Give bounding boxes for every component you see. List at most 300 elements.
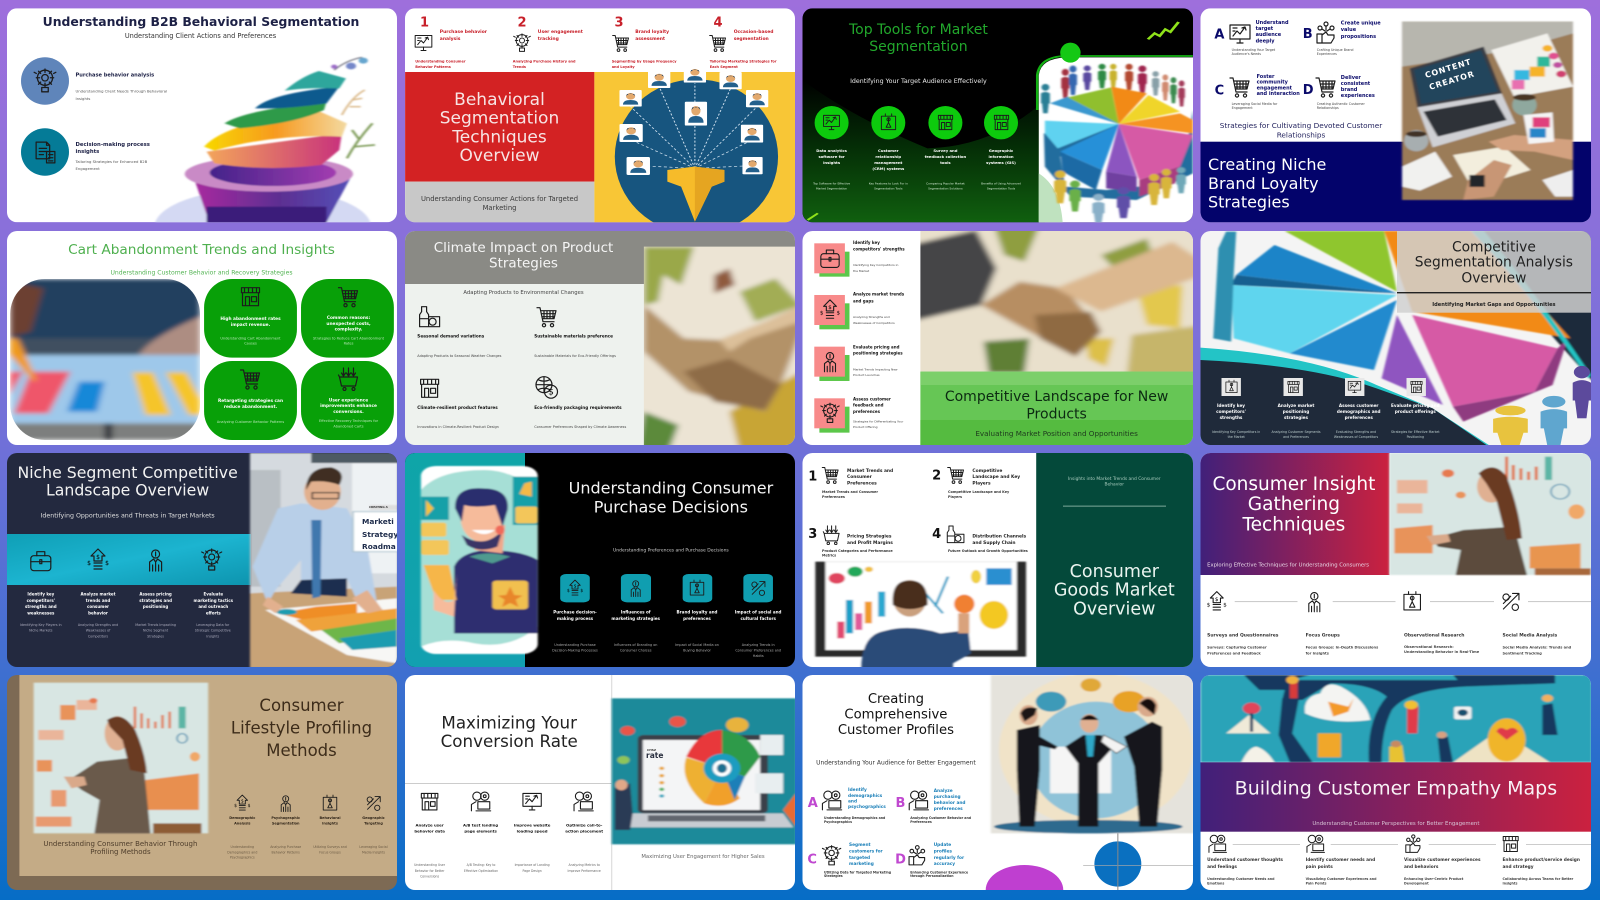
item 2: Competitive [972,468,1002,474]
item: GIS: Benefits of Using Advanced [981,181,1021,185]
item: behavioral insights: Utilizing Surveys and [313,845,347,849]
item: evaluate pricing: positioning strategies [853,351,903,356]
item: purchase behavior analysis: Insights [76,96,90,101]
item: demographic analysis: Psychographics [230,855,255,859]
item: identify competitors: competitors' [1216,409,1246,414]
item 2: 2 [517,15,527,30]
panel: Consumer Insight Gathering Techniques [1200,453,1592,667]
illustration: audience targeting funnel [405,66,796,234]
item: analyze market trends [814,292,905,329]
item B: B [1303,27,1313,42]
item: identify competitors: Identifying Key Players in [20,623,62,627]
card: high abandonment rates: High abandonment rates [220,316,281,322]
item: assess pricing: Assess pricing [139,592,172,597]
item D: Deliver [1341,75,1361,81]
panel: Building Customer Empathy Maps [1200,675,1592,890]
item: identify competitors [1212,378,1260,439]
subtitle [1063,476,1166,506]
item: thoughts and feelings [1207,835,1283,885]
item: analyze user behavior: Understanding User [414,863,446,867]
item: analyze market trends: consumer [87,604,109,609]
item: website speed: loading speed [517,828,548,833]
item: survey and feedback tools [925,106,966,190]
subtitle: Understanding Preferences and Purchase Decisions [613,547,729,553]
overlay box with title: Competitive [1452,240,1536,256]
title: Customer Profiles [838,723,954,738]
item: social media analysis: Social Media Analysis [1502,633,1558,639]
title: Gathering [1248,494,1340,515]
item: identify competitors [814,240,905,277]
item D: accuracy [934,861,955,867]
panel: Competitive Segmentation Analysis Overview [1200,231,1596,447]
item C: Strategies [824,874,843,878]
item 4: Future Outlook and Growth Opportunities [948,549,1028,553]
item: climate-resilient features: Innovations in Climate-Resilient Product Design [417,425,499,429]
item: evaluate marketing tactics: Insights [206,634,220,638]
overlay box with title: Segmentation Analysis [1415,255,1573,271]
item: thoughts and feelings: Emotions [1207,881,1224,885]
item: analyze positioning: and Preferences [1283,435,1309,439]
item: demographic analysis: Analysis [234,821,251,825]
item: purchase decision-making: making process [557,616,594,621]
item: assess demographics: demographics and [1337,409,1381,414]
item: CRM systems: Segmentation Tools [874,186,903,190]
item: assess feedback: feedback and [853,403,884,408]
title: Climate Impact on Product [434,240,613,256]
item: observational research: Understanding Behavior in Real-Time [1404,650,1480,654]
item: analyze market trends: Analyze market trends [853,292,905,297]
item: A/B test: page elements [464,828,497,833]
card: user experience improvements: conversions. [333,409,364,415]
item: assess pricing: Niche Segment [143,628,169,632]
photo: content creator desk [1402,22,1573,200]
card: retargeting strategies: Analyzing Customer Behavior Patterns [217,420,284,424]
item: GIS: systems (GIS) [986,160,1016,165]
item: surveys and questionnaires: Surveys: Capturing Customer [1207,646,1267,650]
item: evaluate pricing [1391,378,1440,439]
item: behavioral insights [313,795,347,854]
item 4: Distribution Channels [972,533,1027,539]
item: product/service design: Enhance product/service design [1502,857,1580,863]
illustration: customer journey map [1201,675,1592,762]
card: user experience improvements [301,361,394,440]
item 3 [612,15,677,69]
item: GIS: Segmentation Tools [987,186,1016,190]
item 4: 4 [713,15,723,30]
item B: behavior and [934,800,966,806]
item C: C [807,852,817,867]
item: assess feedback [814,396,904,433]
item D: experiences [1341,93,1375,99]
photo: content creator desk: CREATOR [1428,69,1476,92]
item: sustainable materials: Sustainable Materials for Eco-Friendly Offerings [534,354,616,358]
item B [1303,20,1381,56]
item A: Understanding Demographics and [824,816,886,820]
photo: man with marketing roadmap: Marketi [362,517,394,526]
item: observational research: Observational Research [1404,633,1464,639]
item 1 [415,15,488,69]
item: psychographic segmentation [270,796,301,854]
item A: demographics [848,793,883,799]
item: geographic targeting [359,797,388,854]
item: needs and pain points: Identify customer needs and [1306,857,1375,863]
card: user experience improvements: improvements enhance [320,403,377,409]
subtitle: Identifying Opportunities and Threats in Target Markets [40,513,215,520]
item: CRM systems [869,106,908,190]
item: assess demographics: Assess customer [1339,403,1379,408]
item: brand loyalty: Brand loyalty and [677,610,718,614]
item: website speed [514,793,551,873]
item: assess pricing: Market Trends Impacting [135,623,176,627]
item: climate-resilient features: Climate-resilient product features [417,405,498,410]
illustration: man at whiteboard [815,562,1026,670]
item: evaluate pricing: Product Launches [853,373,880,377]
item: identify competitors: the Market [1228,435,1246,439]
card: user experience improvements: Abandoned Carts [333,424,364,428]
item: website speed: Importance of Landing [515,863,550,867]
overlay box with title: Overview [1461,271,1526,287]
item: assess feedback: Product Offering [853,425,878,429]
item: decision-making process insights: Engagement [76,166,100,171]
item 3: Pricing Strategies [847,533,892,539]
item: decision-making process insights: insights [76,149,99,155]
card: user experience improvements: Effective Recovery Techniques for [319,419,379,423]
item A: Understand [1256,20,1289,26]
item C: customers for [849,848,884,854]
item 4: Each Segment [710,65,738,69]
item D: Relationships [1317,106,1339,110]
item: CRM systems: (CRM) systems [872,166,905,171]
item A: and [848,798,857,804]
item: A/B test [463,792,498,873]
item: needs and pain points: Pain Points [1306,881,1327,885]
item D: D [1303,83,1314,98]
subtitle: Understanding Customer Behavior and Recovery Strategies [110,270,293,276]
item 1: Preferences [822,495,845,499]
item: social media analysis: Social Media Analysis: Trends and [1502,646,1572,650]
item: CRM systems: Customer [878,148,899,153]
item: product/service design [1502,836,1580,885]
item: assess demographics [1334,378,1381,439]
title: Creating [868,692,924,707]
title: Segmentation [440,109,559,129]
item: analyze market trends: Competitors [88,634,108,638]
item: data analytics software [812,106,850,190]
photo: handshake over world map [644,246,795,445]
item 1: analysis [440,36,461,42]
title: Top Tools for Market [848,22,988,38]
item C: targeted [849,855,870,861]
item: thoughts and feelings: Understand customer thoughts [1207,857,1283,863]
item: seasonal demand [417,307,502,358]
photo: man with marketing roadmap: CREATING A [369,505,389,509]
photo: three business people with globe [991,673,1194,833]
item: focus groups [1306,593,1378,656]
item: surveys and questionnaires [1207,592,1279,656]
card: retargeting strategies: reduce abandonment. [224,404,278,410]
item: assess pricing [135,550,176,638]
photo: man with marketing roadmap: Roadma [362,542,396,551]
item: call-to-action: Improve Performance [568,869,601,873]
title: Understanding B2B Behavioral Segmentation [43,14,359,29]
item: focus groups: for Insights [1306,652,1329,656]
title: Techniques [451,128,547,148]
item: assess feedback: Strategies for Differentiating Your [853,419,904,423]
title: Consumer [259,696,344,715]
item D: profiles [934,848,952,854]
item B: purchasing [934,794,961,800]
item 1: Consumer [847,474,873,480]
item 3: 3 [808,527,817,542]
item: psychographic segmentation: Segmentation [272,821,300,825]
item: assess demographics: Evaluating Strengths and [1336,430,1376,434]
item: marketing influences: Influences of [621,610,651,614]
panel: Climate Impact on Product Strategies [405,231,806,453]
item: identify competitors: Identify key [1217,403,1245,408]
item: survey and feedback tools: Segmentation Solutions [928,186,963,190]
item A: target [1256,26,1274,32]
item: demographic analysis: Understanding [231,845,254,849]
item: product/service design: Insights [1502,881,1517,885]
item 1: 1 [420,15,429,30]
item D: consistent [1341,81,1371,87]
illustration: pie chart with crowd [803,22,1195,223]
item: identify competitors [20,552,62,632]
photo: woman viewing data wall [34,683,208,833]
item 2: User engagement [538,29,584,35]
title: Understanding Consumer [569,478,774,497]
item: analyze user behavior [414,793,446,878]
item B: Experiences [1317,52,1337,56]
panel: Consumer Goods Market Overview [802,453,1194,670]
title: Strategies [1208,192,1290,212]
photo: man with marketing roadmap: Strategy [362,530,398,539]
item: CRM systems: management [874,160,903,165]
item: evaluate marketing tactics: Strategic Competitive [195,628,231,632]
item: brand loyalty [675,574,719,652]
panel: Consumer Lifestyle Profiling Methods [7,675,397,890]
item A [1214,20,1289,56]
item C: Utilizing Data for Targeted Marketing [824,870,892,874]
item: thoughts and feelings: Understanding Customer Needs and [1207,877,1275,881]
item: identify competitors: Identify key [853,240,880,245]
item: product/service design: and strategy [1502,864,1534,870]
item C: Foster [1257,74,1275,80]
item 3: 3 [614,15,624,30]
item: surveys and questionnaires: Preferences and Feedback [1207,652,1261,656]
item D: through Personalization [910,874,954,878]
item 2: 2 [932,469,941,484]
card: retargeting strategies [204,361,297,440]
item A: Understanding Your Target [1232,48,1276,52]
panel: Top Tools for Market Segmentation [802,8,1195,223]
item: analyze market trends: Weaknesses of Competitors [853,321,895,325]
item C: Leveraging Social Media for [1232,102,1278,106]
item 4: segmentation [734,36,769,42]
item D: brand [1341,87,1358,93]
illustration: man with phone and star ratings [421,466,538,654]
photo: content creator desk: CONTENT [1424,57,1473,80]
item D: Update [934,842,951,848]
overlay box with title: Identifying Market Gaps and Opportunities [1432,302,1556,308]
item: analyze positioning [1271,378,1321,439]
item: analyze market trends: Analyzing Strengths and [78,623,118,627]
subtitle: Relationships [1277,131,1325,140]
item: demographic analysis [227,795,257,859]
item: evaluate pricing: Positioning [1407,435,1424,439]
item 1: Understanding Consumer [415,59,466,63]
item: A/B test: Effective Optimization [464,869,498,873]
item: experiences and behaviors: and behaviors [1404,864,1439,870]
item 3: and Loyalty [612,65,635,69]
item: evaluate pricing: Evaluate pricing and [1391,403,1440,408]
item: psychographic segmentation: Behavior Patterns [272,850,300,854]
item: observational research: Observational Research: [1404,645,1454,649]
item 3 [808,526,893,558]
item: seasonal demand: Adapting Products to Seasonal Weather Changes [417,354,502,358]
card: common reasons: Strategies to Reduce Cart Abandonment [313,337,385,341]
item: behavioral insights: Behavioral [319,816,341,820]
item: analyze positioning: Analyzing Customer Segments [1271,430,1321,434]
item: seasonal demand: Seasonal demand variations [417,334,485,338]
title band: Building Customer Empathy Maps [1235,778,1557,800]
item A: audience [1256,32,1282,38]
item 1: Behavior Patterns [415,65,451,69]
photo: woman viewing data wall [1389,453,1592,575]
item 3: Product Categories and Performance [822,549,893,553]
item C: C [1215,84,1224,99]
item C [807,842,892,878]
card: common reasons [301,279,394,358]
item A: Audience's Needs [1232,52,1261,56]
item: geographic targeting: Targeting [364,821,383,825]
item: call-to-action [565,792,603,873]
item: analyze market trends: Analyzing Strengths and [853,315,890,319]
item 4 [710,15,777,69]
item: analyze market trends: Analyze market [80,592,116,597]
title: Behavioral [454,90,545,110]
item: evaluate pricing: Market Trends Impacting New [853,367,898,371]
item: website speed: Page Design [523,869,542,873]
subtitle: Understanding Client Actions and Preferences [125,32,277,40]
item: call-to-action: Analyzing Metrics to [569,863,600,867]
item: assess pricing: positioning [143,604,168,609]
item B: value [1341,27,1357,33]
title: Brand Loyalty [1208,174,1319,193]
title: Consumer Insight [1212,474,1375,495]
item 3: Metrics [822,554,836,558]
item: geographic targeting: Leveraging Social [359,845,388,849]
item: evaluate pricing: Strategies for Effective Market [1391,430,1440,434]
item 3: and Profit Margins [847,540,893,546]
item C [1215,74,1300,110]
item: evaluate pricing: product offerings [1395,409,1436,414]
item 2: tracking [538,36,559,42]
card: high abandonment rates: Understanding Cart Abandonment [220,337,281,341]
item: analyze positioning: Analyze market [1278,403,1314,408]
item: needs and pain points [1306,835,1377,885]
item D: Enhancing Customer Experience [910,870,968,874]
item: survey and feedback tools: tools [940,160,951,165]
item A: deeply [1256,38,1275,44]
item: assess demographics: preferences [1345,415,1373,420]
item: surveys and questionnaires: Surveys and Questionnaires [1207,633,1279,639]
item 2: Analyzing Purchase History and [513,59,576,63]
item B: preferences [934,806,963,812]
item: social media analysis [1502,593,1572,656]
item: identify competitors: weaknesses [27,610,55,615]
item: data analytics software: insights [823,160,841,165]
subtitle: Exploring Effective Techniques for Understanding Consumers [1207,563,1369,569]
item: GIS: information [988,154,1014,159]
title: Overview [459,146,540,166]
item B: B [896,796,905,811]
card: common reasons: complexity. [335,326,363,332]
item D: regularly for [934,855,965,861]
item: analyze market trends [78,549,118,638]
item: evaluate marketing tactics: Leveraging Data for [196,623,230,627]
title: Techniques [1242,515,1345,536]
title: Lifestyle Profiling [231,718,372,737]
panel: Creating Niche Brand Loyalty Strategies [1200,8,1592,223]
photo: tablet with bar chart [10,279,200,440]
title: Conversion Rate [441,731,578,751]
item C: and interaction [1257,91,1300,97]
item: evaluate marketing tactics [194,549,234,638]
item: climate-resilient features [417,379,499,429]
item D: Creating Authentic Customer [1317,102,1365,106]
item A: A [1214,28,1224,43]
item: analyze positioning: strategies [1284,415,1308,420]
card: common reasons: Common reasons: [327,315,370,321]
panel: Niche Segment Competitive Landscape Overview [7,453,399,668]
item: psychographic segmentation: Psychographic [271,816,300,820]
item: observational research [1404,592,1480,654]
item: assess pricing: Strategies [147,634,164,638]
item: data analytics software: Data analytics [816,148,848,153]
item C: marketing [849,861,874,867]
item: social media analysis: Sentiment Tracking [1502,652,1542,656]
item: brand loyalty: Impact of Social Media on [675,643,719,647]
title: Purchase Decisions [594,497,748,516]
item: data analytics software: software for [818,154,845,159]
item: eco-friendly packaging: Consumer Preferences Shaped by Climate Awareness [534,425,626,429]
item: decision-making process insights [21,128,150,176]
item C: engagement [1257,86,1293,92]
item: social and cultural factors: Habits [753,654,764,658]
item B [896,788,972,824]
item C: Segment [849,842,871,848]
subtitle: Understanding Consumer Actions for Targeted [421,195,578,203]
item: CRM systems: relationship [875,154,901,159]
item: data analytics software: Market Segmentation [816,186,847,190]
item: experiences and behaviors: Visualize customer experiences [1404,857,1481,863]
item: analyze user behavior: Conversions [420,874,439,878]
item: survey and feedback tools: Survey and [933,148,958,153]
illustration: spiral stacked layers [154,56,376,222]
item: assess pricing: strategies and [139,598,172,603]
item: marketing influences: Consumer Choices [620,648,652,652]
title band [920,372,1194,446]
title: Methods [266,741,337,760]
item: demographic analysis: Demographics and [227,850,257,854]
panel: Maximizing Your Conversion Rate [405,675,796,890]
item: marketing influences: Influences of Branding on [614,643,657,647]
item: evaluate pricing [814,344,903,381]
item: evaluate marketing tactics: efforts [206,610,221,615]
item: purchase behavior analysis: Understanding Client Needs Through Behavioral [76,89,167,94]
item: demographic analysis: Demographic [229,816,255,820]
